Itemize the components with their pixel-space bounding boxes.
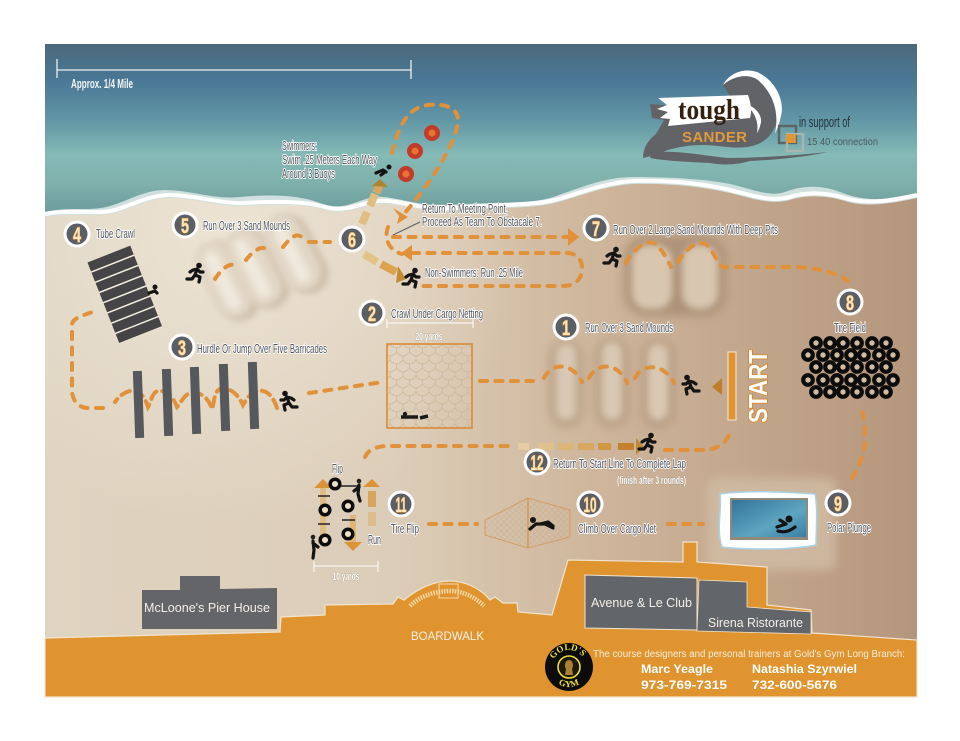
sea background <box>45 44 917 224</box>
route: tire field to polar plunge <box>852 412 865 478</box>
label: obstacle 7: Run Over 2 Large Sand Mounds With Deep Pits <box>613 223 778 237</box>
route: plunge to climb <box>668 522 703 526</box>
label: return to meeting point: Proceed As Team To Obstacale 7. <box>422 215 542 229</box>
boardwalk arch detail <box>410 584 484 606</box>
label: return to meeting point <box>422 202 542 229</box>
10 yards dimension <box>314 561 378 583</box>
label: obstacle 1: Run Over 3 Sand Mounds <box>585 321 673 335</box>
route: obstacle 5 humps <box>215 235 330 279</box>
label: swimmers: Around 3 Buoys <box>282 167 335 181</box>
10 yards dimension: 10 yards <box>332 571 360 583</box>
building: McLoone's Pier House <box>142 576 277 629</box>
icon: runner 3 <box>281 391 297 410</box>
return route arrows <box>387 208 582 286</box>
badge 11: 11 <box>396 494 407 517</box>
label: swimmers: Swimmers: <box>282 139 317 153</box>
buoys <box>398 125 440 182</box>
badge 4: 4 <box>73 224 81 247</box>
sand mounds: obstacle 1 <box>549 338 675 428</box>
label: obstacle 4: Tube Crawl <box>96 227 135 241</box>
label: non-swimmers: Non-Swimmers: Run .25 Mile <box>425 266 523 280</box>
scale bar: Approx. 1/4 Mile <box>71 76 133 91</box>
logo: gold's gym: GYM <box>560 679 580 688</box>
badge 5: 5 <box>181 215 189 238</box>
icon: runner 6 <box>403 268 419 287</box>
badge 9: 9 <box>834 493 842 516</box>
badge 10: 10 <box>584 494 596 517</box>
label: flip: Flip <box>332 462 343 476</box>
tube crawl obstacle <box>87 246 162 343</box>
footer: trainers: 973-769-7315 <box>641 678 727 692</box>
label: return to meeting point: Return To Meeting Point, <box>422 202 508 216</box>
sand mounds: obstacle 5 <box>188 204 336 330</box>
label: obstacle 10: Climb Over Cargo Net <box>578 522 656 536</box>
label: obstacle 9: Polar Plunge <box>827 521 871 535</box>
badge 1: 1 <box>562 317 570 340</box>
icon: swimmer <box>376 164 392 175</box>
building: Sirena Ristorante <box>697 580 811 634</box>
route: climb to tire flip <box>429 522 477 526</box>
footer: trainers: Marc Yeagle <box>641 662 713 676</box>
building: Sirena Ristorante: Sirena Ristorante <box>708 615 803 630</box>
barricades <box>133 362 259 438</box>
icon: person in tube <box>149 284 158 293</box>
non-swimmer arrow from obstacle 6 <box>364 254 406 283</box>
sand mounds: obstacle 7 <box>624 236 726 316</box>
badge 2 <box>358 300 386 326</box>
badge 3: 3 <box>178 337 186 360</box>
swim route <box>392 105 458 216</box>
20 yards dimension <box>387 319 473 343</box>
logo: 15 40 connection: 15 40 connection <box>807 137 878 148</box>
logo: tough sander <box>643 71 828 164</box>
pointer line <box>393 222 420 235</box>
tire flip obstacle <box>311 479 380 558</box>
label: obstacle 12 <box>553 457 686 487</box>
label: swimmers: Swim .25 Meters Each Way <box>282 153 377 167</box>
building: McLoone's Pier House: McLoone's Pier House <box>144 600 270 615</box>
label: obstacle 8: Tire Field <box>834 321 866 335</box>
label: run: Run <box>368 533 381 547</box>
logo: gold's gym: GOLD'S <box>550 644 586 658</box>
scale bar <box>57 59 411 91</box>
footer: trainers: Natashia Szyrwiel <box>752 662 857 676</box>
logo: 15 40 connection <box>779 114 878 151</box>
badge 8: 8 <box>846 292 854 315</box>
polar plunge halo <box>708 478 836 570</box>
route: barricades to tube crawl <box>72 310 103 408</box>
swim arrow from obstacle 6 <box>362 179 388 224</box>
badge 1 <box>552 314 580 340</box>
label: obstacle 12: (finish after 3 rounds) <box>617 475 686 487</box>
logo: tough sander: SANDER <box>682 129 747 146</box>
icon: runner 7 <box>604 247 620 266</box>
climb over cargo net <box>485 498 570 548</box>
badge 7 <box>582 214 610 242</box>
badge 6 <box>338 226 366 252</box>
badge 6: 6 <box>348 229 356 252</box>
badge 12: 12 <box>530 452 544 475</box>
icon: runner 12 <box>639 433 655 452</box>
polar plunge pool <box>719 492 817 549</box>
badge 2: 2 <box>368 303 376 326</box>
start line: START <box>743 350 773 423</box>
shoreline foam <box>45 177 917 225</box>
label: obstacle 2: Crawl Under Cargo Netting <box>391 307 483 321</box>
badge 5 <box>172 212 198 238</box>
label: obstacle 12: Return To Start Line To Complete Lap <box>553 457 686 471</box>
route: obstacle 7 humps <box>626 242 848 281</box>
badge 8 <box>836 288 864 316</box>
sand highlight <box>45 198 560 520</box>
icon: runner 1 <box>683 375 699 394</box>
footer: trainers: 732-600-5676 <box>752 678 837 692</box>
20 yards dimension: 20 yards <box>416 331 442 343</box>
route: return to start <box>365 433 730 457</box>
label: swimmers <box>282 139 377 181</box>
badge 7: 7 <box>592 218 600 241</box>
label: obstacle 11: Tire Flip <box>391 522 419 536</box>
logo: gold's gym <box>545 643 593 691</box>
footer: trainers <box>593 649 905 692</box>
boardwalk label: BOARDWALK <box>411 629 484 643</box>
label: obstacle 5: Run Over 3 Sand Mounds <box>203 219 290 233</box>
route: barricade humps <box>115 388 277 409</box>
start line <box>712 350 773 423</box>
boardwalk <box>45 542 917 697</box>
badge 12 <box>524 448 550 476</box>
badge 9 <box>824 490 852 516</box>
foam highlight <box>45 181 917 214</box>
logo: tough sander: tough <box>678 95 740 126</box>
route: obstacle 1 humps <box>309 366 674 393</box>
badge 3 <box>168 334 196 360</box>
sand <box>45 184 917 640</box>
building: Avenue & Le Club <box>585 575 697 630</box>
badge 10 <box>576 490 604 518</box>
tire field <box>803 338 898 397</box>
footer: trainers: The course designers and personal trainers at Gold's Gym Long Branch: <box>593 649 905 660</box>
logo: 15 40 connection: in support of <box>799 114 851 131</box>
badge 11 <box>388 490 414 518</box>
label: obstacle 3: Hurdle Or Jump Over Five Barricades <box>197 342 327 356</box>
icon: runner 5 <box>187 263 203 282</box>
crawl under cargo netting <box>387 344 472 428</box>
building: Avenue & Le Club: Avenue & Le Club <box>591 595 692 610</box>
badge 4 <box>64 220 90 248</box>
